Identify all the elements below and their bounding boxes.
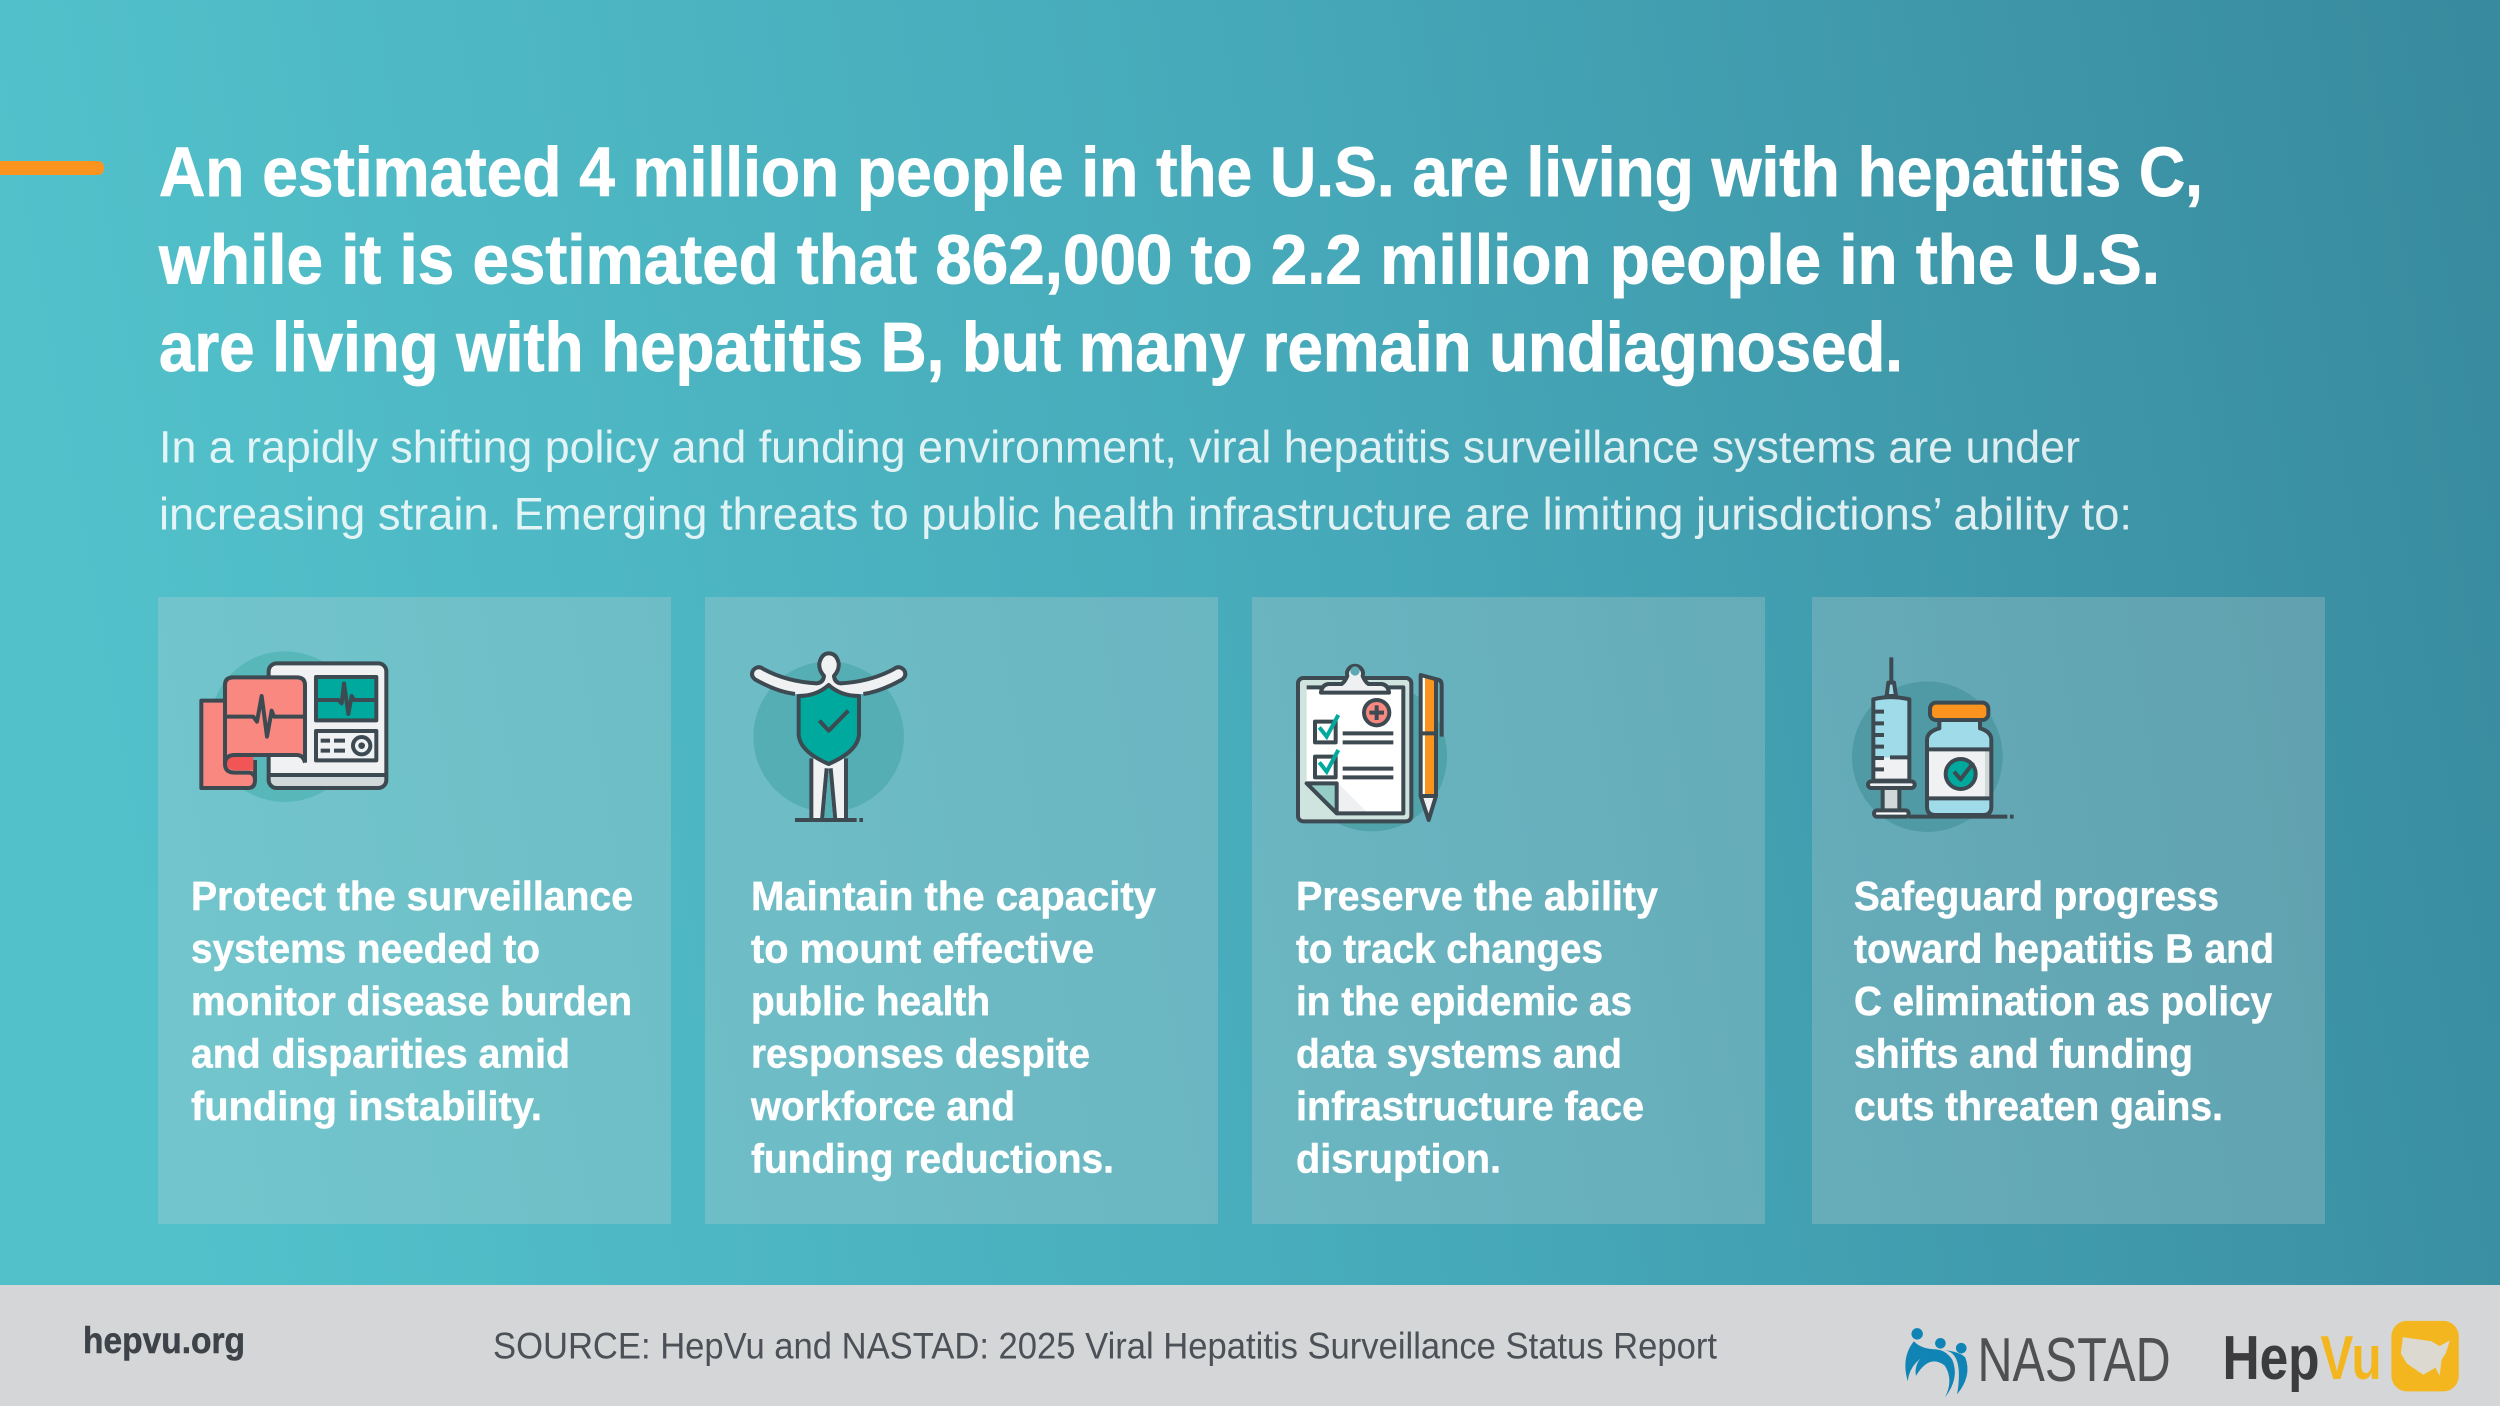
card text: public health bbox=[751, 978, 990, 1024]
card text: workforce and bbox=[750, 1083, 1015, 1129]
card text: infrastructure face bbox=[1296, 1083, 1644, 1129]
intro text bbox=[159, 422, 2132, 540]
card text: Preserve the ability bbox=[1296, 873, 1658, 919]
card text bbox=[1854, 873, 2274, 1129]
card text: funding instability. bbox=[191, 1083, 542, 1129]
card text: cuts threaten gains. bbox=[1854, 1083, 2223, 1129]
card text: shifts and funding bbox=[1854, 1030, 2193, 1076]
card text: in the epidemic as bbox=[1296, 978, 1632, 1024]
panel: preserve ability to track bbox=[1252, 597, 1765, 1224]
title: while it is estimated that 862,000 to 2.2 million people in the U.S. bbox=[158, 220, 2160, 298]
card text: disruption. bbox=[1296, 1136, 1501, 1182]
source: SOURCE: HepVu and NASTAD: 2025 Viral Hepatitis Surveillance Status Report bbox=[493, 1326, 1718, 1366]
icon: clipboard and pen bbox=[1296, 666, 1447, 831]
card text: responses despite bbox=[751, 1030, 1090, 1076]
card text: Protect the surveillance bbox=[191, 873, 633, 919]
panel: maintain capacity bbox=[705, 597, 1218, 1224]
intro text: increasing strain. Emerging threats to public health infrastructure are limiting jurisdictions’ ability to: bbox=[159, 488, 2132, 540]
card text: Safeguard progress bbox=[1854, 873, 2219, 919]
title: are living with hepatitis B, but many remain undiagnosed. bbox=[159, 308, 1903, 386]
intro text: In a rapidly shifting policy and funding environment, viral hepatitis surveillance systems are under bbox=[159, 422, 2080, 472]
logo: HepVu: Vu bbox=[2320, 1324, 2382, 1393]
card text: Maintain the capacity bbox=[751, 873, 1156, 919]
logo: HepVu: Hep bbox=[2222, 1324, 2320, 1393]
card text: systems needed to bbox=[191, 926, 540, 972]
panel: protect surveillance systems bbox=[158, 597, 671, 1224]
logo: HepVu bbox=[2222, 1321, 2459, 1393]
footer bar bbox=[0, 1285, 2500, 1406]
title: An estimated 4 million people in the U.S. are living with hepatitis C, bbox=[159, 133, 2203, 211]
icon: person with shield bbox=[752, 653, 905, 820]
card text: to track changes bbox=[1296, 926, 1603, 972]
website: hepvu.org bbox=[83, 1320, 245, 1361]
card text: data systems and bbox=[1296, 1030, 1622, 1076]
card text: funding reductions. bbox=[751, 1136, 1114, 1182]
icon: monitor and ECG chart bbox=[201, 651, 386, 802]
card text: toward hepatitis B and bbox=[1854, 926, 2274, 972]
panel: safeguard progress bbox=[1812, 597, 2325, 1224]
title bbox=[158, 133, 2203, 386]
card text: to mount effective bbox=[751, 926, 1094, 972]
icon: syringe and vial bbox=[1852, 657, 2014, 832]
logo: NASTAD bbox=[1905, 1326, 2171, 1398]
logo: NASTAD: NASTAD bbox=[1978, 1326, 2171, 1395]
card text: monitor disease burden bbox=[191, 978, 632, 1024]
card text bbox=[1296, 873, 1658, 1182]
card text: and disparities amid bbox=[191, 1030, 570, 1076]
accent bar bbox=[0, 161, 104, 175]
card text: C elimination as policy bbox=[1854, 978, 2272, 1024]
card text bbox=[191, 873, 633, 1129]
card text bbox=[750, 873, 1156, 1182]
